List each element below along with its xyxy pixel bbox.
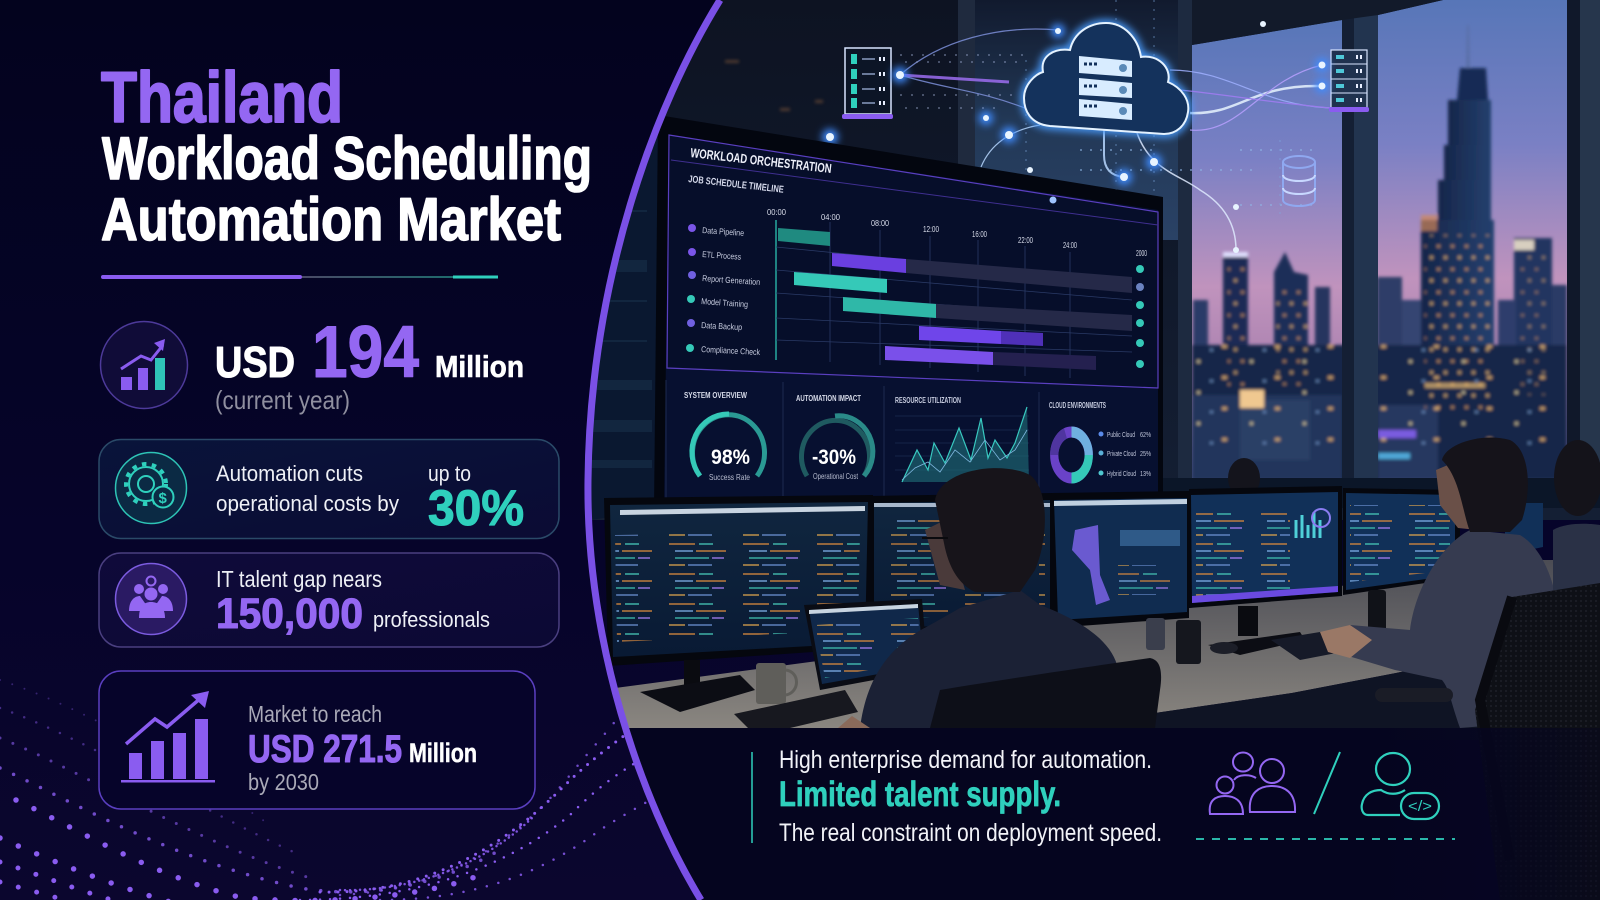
time axis labels: 04:00	[821, 212, 840, 222]
sky window right	[1378, 0, 1567, 480]
monitor body	[654, 115, 1163, 510]
job labels: Data Backup	[701, 320, 743, 332]
window frames	[958, 0, 1600, 480]
card value: Million	[409, 738, 477, 768]
card: operational costs	[99, 440, 559, 538]
monitor 4	[1189, 486, 1342, 655]
title line: Automation Market: Automation Market	[101, 186, 561, 253]
worker far right	[1553, 440, 1600, 590]
chair frame	[1480, 597, 1512, 860]
gantt bars	[778, 228, 1132, 370]
icon: database	[1283, 156, 1315, 206]
mug	[756, 663, 796, 704]
card text: IT talent gap nears	[216, 566, 382, 592]
value text: 194	[312, 312, 419, 393]
monitor 5	[1343, 488, 1460, 595]
glass pane behind cloud	[975, 0, 1180, 240]
donut: cloud environments: 62%	[1140, 432, 1151, 439]
callout line 2: Limited talent supply.	[779, 775, 1061, 814]
gauge: automation impact: AUTOMATION IMPACT	[796, 394, 861, 403]
area chart: resource utilization: RESOURCE UTILIZATION	[895, 396, 961, 405]
donut: cloud environments: Public Cloud	[1107, 432, 1135, 439]
time axis labels: 22:00	[1018, 235, 1033, 245]
monitor 2	[870, 493, 1052, 640]
dashed underline	[1196, 838, 1455, 840]
icon: gear with coin	[116, 452, 186, 524]
value text: USD	[215, 338, 295, 387]
donut: cloud environments: Private Cloud	[1107, 451, 1136, 458]
icon: gear with coin: $	[158, 490, 168, 507]
card text	[216, 461, 471, 516]
dotted wave decoration	[0, 680, 650, 900]
cup and bottle	[1146, 590, 1386, 664]
icon: forecast chart	[121, 691, 215, 782]
time axis labels: 12:00	[923, 224, 939, 234]
worker center	[838, 468, 1161, 728]
area chart: resource utilization	[895, 396, 1029, 482]
card: talent gap	[99, 553, 559, 647]
room interior	[580, 0, 1600, 520]
value text: Million	[435, 349, 524, 384]
card value: 30%	[428, 480, 524, 536]
time axis labels: 24:00	[1063, 240, 1077, 250]
dashboard background	[664, 135, 1158, 505]
monitor header node	[1050, 196, 1056, 204]
bottom caption strip	[590, 728, 1600, 900]
status dots	[1136, 265, 1144, 368]
title divider	[101, 275, 498, 279]
time axis labels: 08:00	[871, 218, 889, 228]
big monitor: workload orchestration dashboard	[654, 115, 1163, 510]
tile dividers	[666, 380, 1039, 505]
card value: 150,000	[216, 590, 363, 638]
desk surface	[600, 560, 1600, 728]
time axis labels: 00:00	[767, 207, 786, 217]
monitor 6	[1505, 503, 1543, 555]
gauge: automation impact	[796, 394, 873, 481]
dashboard title: WORKLOAD ORCHESTRATION	[690, 145, 832, 176]
donut: cloud environments: 13%	[1140, 471, 1151, 478]
callout line 1: High enterprise demand for automation.	[779, 746, 1152, 774]
network nodes	[826, 21, 1326, 253]
job labels	[701, 225, 761, 357]
icon: server rack left	[842, 48, 893, 119]
time axis labels	[767, 207, 1147, 258]
card text: Market to reach	[248, 701, 382, 727]
job labels: Report Generation	[702, 273, 761, 287]
value text	[215, 312, 524, 393]
gauge: system overview: SYSTEM OVERVIEW	[684, 391, 747, 400]
job labels: Compliance Check	[701, 344, 761, 357]
monitor row	[604, 486, 1543, 712]
monitor 1	[604, 495, 873, 712]
chair right	[1475, 583, 1600, 900]
card text: operational costs by	[216, 491, 399, 516]
icon: glowing cloud	[1024, 23, 1188, 134]
left side monitor	[592, 137, 658, 520]
callout: talent constraint	[752, 746, 1162, 847]
card note: by 2030	[248, 769, 319, 795]
keyboard and mouse right	[1271, 632, 1352, 660]
desk dark underside	[1155, 672, 1478, 728]
header divider	[671, 160, 1158, 225]
left monitor details	[592, 210, 652, 468]
icon: slash separator	[1314, 752, 1340, 814]
timeline panel frame	[667, 135, 1158, 388]
time axis labels: 16:00	[972, 229, 987, 239]
card text: up to	[428, 461, 471, 486]
gauge: system overview: 98%	[711, 446, 750, 469]
stat: current market size	[100, 312, 524, 415]
hologram network lines	[900, 0, 1330, 250]
photo: operations room	[580, 0, 1600, 900]
skyline	[1192, 25, 1567, 480]
network node glow	[822, 24, 1329, 185]
icon: developer with code badge	[1362, 753, 1439, 819]
timeline grid	[776, 220, 1132, 378]
icon: developer with code badge: </>	[1408, 798, 1432, 815]
worker right	[1320, 438, 1560, 728]
period note: (current year)	[215, 385, 350, 415]
gauge: automation impact: Operational Cost	[813, 471, 858, 481]
title line: Workload Scheduling: Workload Scheduling	[102, 125, 592, 192]
icon: team	[116, 564, 186, 634]
icon: enterprise people group	[1210, 752, 1295, 814]
icon: server rack right	[1329, 50, 1369, 112]
title line: Thailand: Thailand	[101, 59, 343, 138]
card text: Automation cuts	[216, 461, 363, 486]
donut: cloud environments	[1049, 401, 1151, 478]
gauge: automation impact: -30%	[812, 446, 856, 469]
icon: growth chart	[100, 322, 188, 408]
time axis labels: 2000	[1136, 248, 1147, 258]
gauge: system overview: Success Rate	[709, 472, 750, 482]
callout line 3: The real constraint on deployment speed.	[779, 819, 1162, 847]
card value: USD 271.5	[248, 728, 402, 771]
job dots	[686, 224, 696, 352]
timeline subtitle: JOB SCHEDULE TIMELINE	[688, 174, 785, 196]
job labels: Data Pipeline	[702, 225, 745, 238]
job labels: ETL Process	[702, 249, 741, 262]
donut: cloud environments: CLOUD ENVIRONMENTS	[1049, 401, 1106, 410]
chair arm	[1375, 688, 1453, 702]
laptop	[734, 599, 928, 728]
back row behind monitors	[1163, 478, 1600, 508]
monitor 3	[1052, 491, 1189, 628]
card unit: professionals	[373, 607, 490, 632]
curved purple divider	[588, 0, 720, 900]
distant worker head	[1228, 458, 1260, 488]
donut: cloud environments: Hybrid Cloud	[1107, 471, 1136, 478]
sky window left	[1192, 20, 1342, 480]
title	[101, 59, 592, 253]
job labels: Model Training	[701, 296, 749, 309]
card: market forecast	[99, 671, 535, 809]
gauge: system overview	[684, 391, 764, 482]
donut: cloud environments: 25%	[1140, 451, 1151, 458]
orange interior reflections	[725, 60, 823, 111]
